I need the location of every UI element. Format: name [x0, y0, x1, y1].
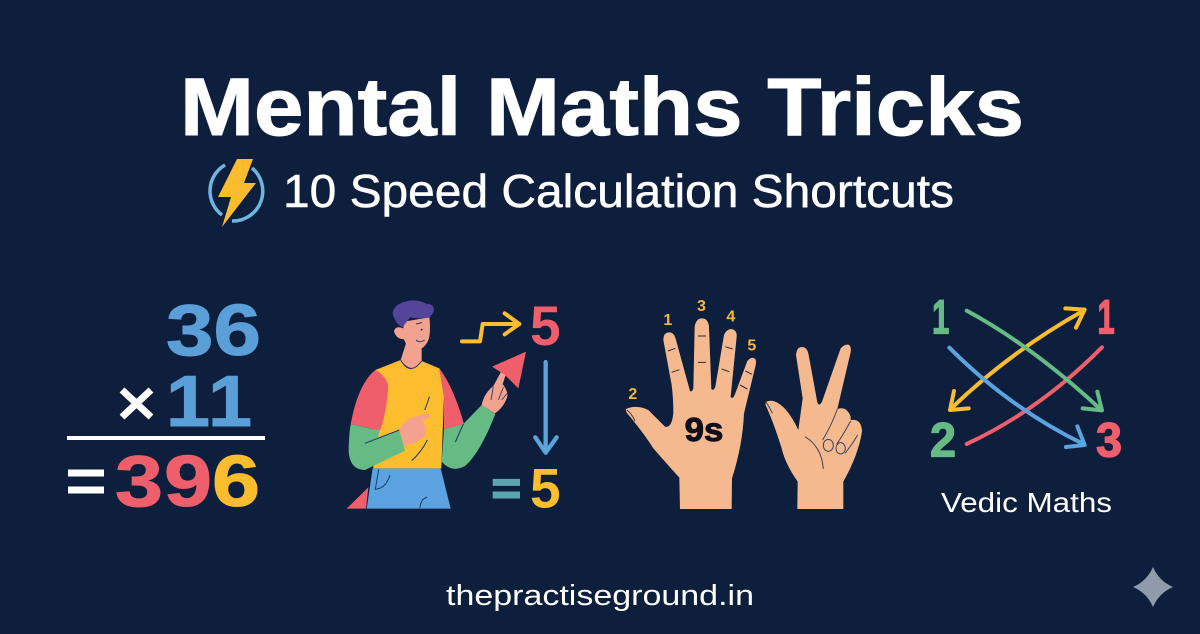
vedic maths caption: Vedic Maths [941, 487, 1112, 518]
digits [930, 291, 1122, 468]
website footer: thepractiseground.in [446, 580, 754, 612]
trousers [367, 468, 451, 509]
digit 5 yellow: 5 [530, 456, 561, 519]
green arrow [967, 311, 1102, 410]
finger labels: 5 [747, 337, 756, 354]
equals sign blue green [493, 482, 520, 495]
hands counting nines [626, 298, 862, 509]
result line [67, 436, 265, 440]
yellow step arrow [462, 313, 519, 341]
digits: 1 [932, 291, 949, 344]
hand left [399, 413, 430, 446]
result digit 6: 6 [212, 442, 260, 522]
red sleeve left [351, 370, 388, 431]
left hand [626, 318, 756, 509]
folded fingers [766, 402, 858, 469]
red arrow head [492, 352, 526, 388]
red cross line [967, 347, 1102, 444]
right hand [765, 345, 862, 509]
hair [393, 300, 434, 327]
hand right with pointing finger [482, 370, 507, 413]
subtitle: 10 Speed Calculation Shortcuts [283, 165, 954, 217]
digit 5 red: 5 [530, 294, 561, 357]
multiplier: 1 [166, 362, 210, 442]
blue down arrow [535, 362, 557, 453]
finger labels: 3 [697, 298, 706, 315]
finger labels: 2 [628, 386, 637, 403]
digits: 2 [930, 415, 956, 468]
vedic maths cross diagram [930, 291, 1122, 468]
result digit 3: 3 [115, 442, 163, 522]
equals sign [68, 473, 104, 490]
green arm left [349, 424, 405, 470]
9s label: 9s [685, 412, 723, 449]
finger creases [668, 336, 752, 389]
head [394, 317, 430, 351]
yellow shirt [373, 360, 444, 468]
blue arrow [949, 348, 1085, 447]
icon: sparkle [1133, 567, 1173, 607]
finger labels: 1 [663, 312, 672, 329]
icon: lightning bolt in ring [210, 159, 263, 227]
person pointing with number flow [347, 294, 561, 519]
multiplication example [67, 291, 265, 522]
digits: 3 [1096, 415, 1122, 468]
thumb nail [627, 410, 635, 421]
face details [416, 323, 425, 342]
multiplier [122, 362, 252, 442]
finger labels: 4 [726, 309, 735, 326]
result digit 9: 9 [164, 442, 212, 522]
neck [401, 343, 422, 368]
red sleeve right [439, 368, 464, 429]
red triangle at bottom [347, 487, 368, 509]
title: Mental Maths Tricks [180, 62, 1024, 153]
green arm right [442, 405, 495, 469]
multiplicand: 36 [166, 291, 261, 371]
multiplier: 1 [208, 362, 252, 442]
finger labels [628, 298, 756, 403]
digits: 1 [1097, 291, 1115, 344]
yellow double arrow [950, 308, 1085, 410]
